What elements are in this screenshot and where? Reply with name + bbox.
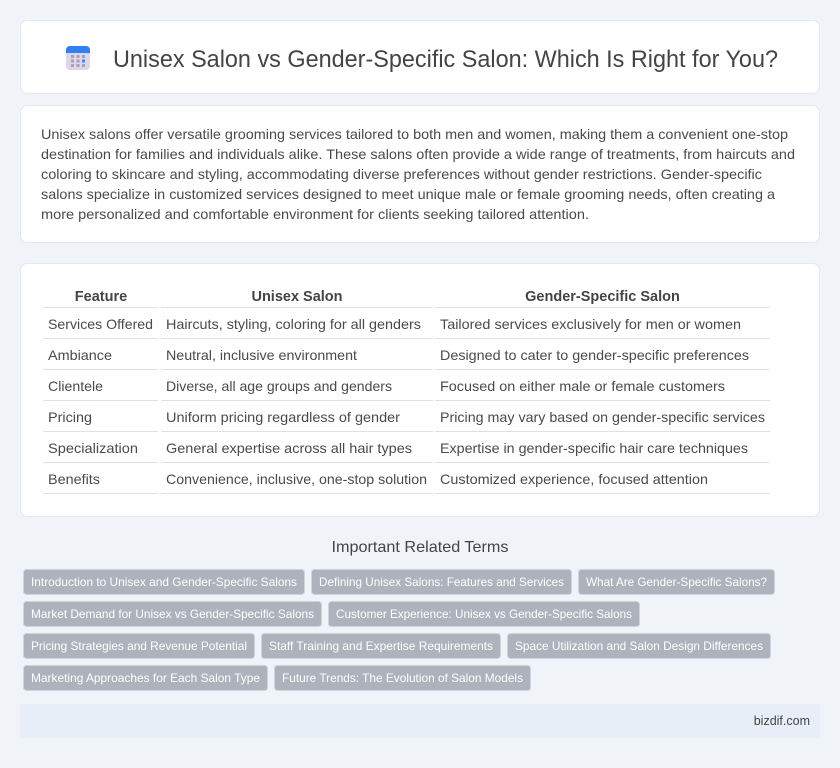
panel: related term tags: [24, 570, 774, 690]
row: clientele: Focused on either male or female customers: [440, 378, 725, 394]
table header: Feature: [75, 289, 127, 305]
row: pricing: Pricing may vary based on gender-specific services: [440, 409, 765, 425]
row: clientele: Diverse, all age groups and genders: [166, 378, 392, 394]
panel: related term tags: Pricing Strategies and Revenue Potential: [31, 639, 247, 653]
row: services offered: [48, 316, 741, 332]
panel: related term tags: Customer Experience: Unisex vs Gender-Specific Salons: [336, 607, 632, 621]
panel: related term tags: Defining Unisex Salons: Features and Services: [319, 575, 564, 589]
footer bar: bizdif.com: [754, 714, 810, 728]
panel: introduction paragraph: destination for families and individuals alike. These salons often provide a wide range of treatments, from haircuts and: [41, 146, 795, 162]
panel: introduction paragraph: coloring to skincare and styling, accommodating diverse preferences without gender restrictions. Gender-specific: [41, 166, 762, 182]
row: services offered: Tailored services exclusively for men or women: [440, 316, 741, 332]
row: pricing: Pricing: [48, 409, 92, 425]
row: pricing: Uniform pricing regardless of gender: [166, 409, 400, 425]
row: specialization: [48, 440, 748, 456]
panel: related term tags: What Are Gender-Specific Salons?: [586, 575, 767, 589]
row: benefits: [48, 471, 708, 487]
panel: comparison table: [20, 264, 820, 516]
row: specialization: General expertise across all hair types: [166, 440, 412, 456]
panel: related term tags: Marketing Approaches for Each Salon Type: [31, 671, 260, 685]
panel: related term tags: Market Demand for Unisex vs Gender-Specific Salons: [31, 607, 314, 621]
panel: introduction paragraph: salons specialize in customized services designed to meet unique male or female grooming needs, often creating a: [41, 186, 775, 202]
row: clientele: Clientele: [48, 378, 103, 394]
panel: related term tags: Staff Training and Expertise Requirements: [269, 639, 493, 653]
table header: [75, 289, 680, 305]
row: pricing: [48, 409, 765, 425]
panel: introduction paragraph: more personalized and comfortable environment for clients seeking tailored attention.: [41, 206, 589, 222]
panel: introduction paragraph: [20, 106, 820, 242]
panel: title header: [20, 20, 820, 94]
footer bar: [20, 704, 820, 738]
row: specialization: Expertise in gender-specific hair care techniques: [440, 440, 748, 456]
panel: related term tags: Space Utilization and Salon Design Differences: [515, 639, 763, 653]
panel: related term tags: Introduction to Unisex and Gender-Specific Salons: [31, 575, 297, 589]
title: Unisex Salon vs Gender-Specific Salon: Which Is Right for You?: [113, 46, 778, 73]
table header: Gender-Specific Salon: [525, 289, 680, 305]
row: benefits: Customized experience, focused attention: [440, 471, 708, 487]
icon: calendar: [66, 46, 90, 70]
row: benefits: Convenience, inclusive, one-stop solution: [166, 471, 427, 487]
panel: introduction paragraph: Unisex salons offer versatile grooming services tailored to both men and women, making them a convenient one-stop: [41, 126, 788, 142]
row: benefits: Benefits: [48, 471, 100, 487]
heading: important related terms: Important Related Terms: [332, 539, 508, 556]
row: services offered: Services Offered: [48, 316, 153, 332]
table header: Unisex Salon: [251, 289, 343, 305]
row: specialization: Specialization: [48, 440, 138, 456]
panel: related term tags: Future Trends: The Evolution of Salon Models: [282, 671, 523, 685]
row: ambiance: Designed to cater to gender-specific preferences: [440, 347, 749, 363]
row: clientele: [48, 378, 725, 394]
row: services offered: Haircuts, styling, coloring for all genders: [166, 316, 421, 332]
row: ambiance: [48, 347, 749, 363]
row: ambiance: Neutral, inclusive environment: [166, 347, 357, 363]
row: ambiance: Ambiance: [48, 347, 112, 363]
